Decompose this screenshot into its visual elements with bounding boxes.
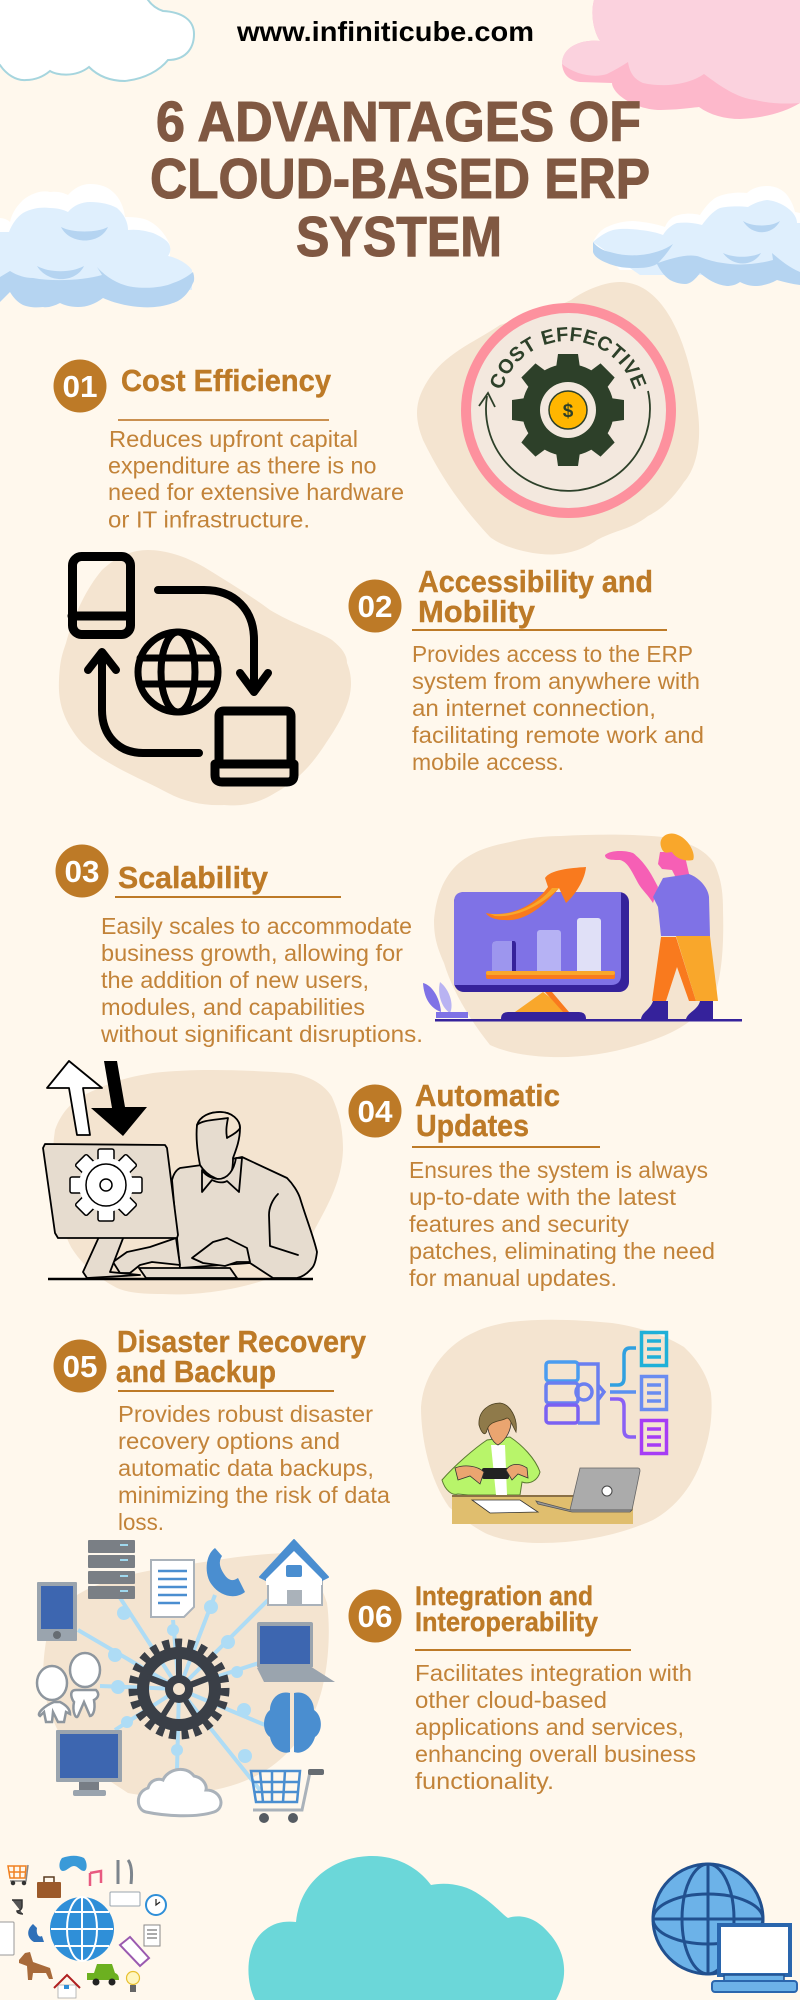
icon: handset — [28, 1924, 44, 1942]
body 01: expenditure as there is no — [108, 452, 376, 478]
cloud: pink top right — [562, 0, 800, 119]
icon: monitor — [56, 1730, 122, 1796]
body 01: need for extensive hardware — [108, 479, 404, 505]
badge number 06: 06 — [358, 1599, 392, 1634]
curved label: COST EFFECTIVE — [490, 327, 646, 390]
icon: laptop — [215, 711, 294, 782]
heading 02: Accessibility and — [418, 564, 653, 599]
heading 04: Automatic — [415, 1078, 560, 1113]
icon: dog — [19, 1952, 53, 1980]
icon: globe — [138, 632, 218, 712]
icon: cart — [8, 1865, 28, 1884]
badge number 02 — [348, 580, 402, 632]
icon: brain — [264, 1692, 321, 1753]
body 02 — [412, 641, 704, 775]
title — [150, 90, 650, 269]
icon: cloud — [138, 1769, 221, 1816]
body 05: recovery options and — [118, 1428, 340, 1454]
body 04: up-to-date with the latest — [409, 1184, 676, 1210]
body 04 — [409, 1157, 715, 1291]
heading 02 — [418, 564, 653, 629]
body 02: Provides access to the ERP — [412, 641, 693, 667]
person — [442, 1403, 540, 1495]
arrow: growth — [486, 867, 586, 920]
icon: plug — [12, 1900, 23, 1914]
arrow: bottom left — [88, 652, 199, 753]
body 01: or IT infrastructure. — [108, 506, 310, 532]
icon: iot globe — [50, 1897, 114, 1961]
icon: suitcase — [37, 1877, 61, 1898]
badge number 05 — [54, 1340, 106, 1392]
body 01 — [108, 426, 404, 532]
illustration 04: man at computer — [43, 1061, 343, 1294]
heading 03: Scalability — [118, 860, 269, 895]
arrow: down black — [91, 1061, 147, 1136]
icon: music note — [90, 1871, 101, 1886]
body 05: loss. — [118, 1509, 164, 1535]
icon: telephone — [207, 1548, 245, 1596]
panel 04: automatic updates text — [348, 1078, 715, 1291]
icon: document — [151, 1560, 194, 1617]
body 03: the addition of new users, — [101, 967, 369, 993]
title: CLOUD-BASED ERP — [150, 147, 650, 211]
heading 04 — [415, 1078, 560, 1143]
body 02: facilitating remote work and — [412, 722, 704, 748]
body 05: Provides robust disaster — [118, 1401, 373, 1427]
body 05 — [118, 1401, 391, 1535]
icon: clock — [146, 1895, 166, 1915]
body 06: functionality. — [415, 1768, 554, 1794]
icon: plant — [423, 982, 468, 1018]
connector spokes — [78, 1590, 268, 1790]
icon: monitor chart — [454, 892, 629, 1019]
badge number 04 — [348, 1084, 402, 1138]
icon: phone — [72, 556, 130, 634]
illustration 06: integration hub — [37, 1540, 335, 1823]
icon: gear with dollar — [512, 354, 624, 466]
body 03: without significant disruptions. — [100, 1021, 423, 1047]
panel 06: integration text — [348, 1581, 696, 1794]
website url: www.infiniticube.com — [236, 16, 534, 47]
icon: server network — [546, 1332, 666, 1454]
illustration 05: person with laptop and servers — [421, 1320, 712, 1543]
body 04: patches, eliminating the need — [409, 1238, 715, 1264]
cloud: blue left — [0, 184, 194, 307]
title: 6 ADVANTAGES OF — [156, 90, 641, 154]
person — [605, 833, 718, 1019]
icon: house — [54, 1975, 80, 1998]
body 02: mobile access. — [412, 749, 564, 775]
icon: server rack — [88, 1540, 135, 1599]
body 05: minimizing the risk of data — [118, 1482, 391, 1508]
icon: document — [144, 1925, 160, 1946]
body 06: enhancing overall business — [415, 1741, 696, 1767]
icon: shopping cart — [251, 1769, 324, 1823]
icon: bulb — [126, 1972, 140, 1992]
arrow: top right — [158, 590, 268, 692]
body 03: modules, and capabilities — [101, 994, 365, 1020]
icon: white gear — [70, 1149, 142, 1221]
icon: air conditioner — [110, 1892, 140, 1906]
body 06: other cloud-based — [415, 1687, 607, 1713]
badge number 06 — [348, 1590, 402, 1642]
icon: fork and knife — [118, 1860, 132, 1884]
cloud: blue right — [593, 186, 800, 286]
icon: laptop — [536, 1468, 640, 1512]
icon: piano — [120, 1937, 149, 1966]
badge number 02: 02 — [358, 589, 392, 624]
cloud: teal bottom — [248, 1856, 564, 2000]
body 02: system from anywhere with — [412, 668, 700, 694]
heading 05 — [116, 1324, 367, 1389]
icon: gamepad — [59, 1856, 87, 1871]
badge number 03 — [56, 844, 108, 898]
badge number 01: 01 — [62, 369, 98, 404]
icon: people — [37, 1653, 100, 1722]
icon: hub gear — [133, 1643, 225, 1735]
panel 02: accessibility text — [348, 564, 704, 775]
icon: car — [87, 1964, 119, 1986]
cloud: white top left — [0, 0, 194, 81]
badge number 03: 03 — [64, 854, 100, 889]
icon: circular arrow — [479, 391, 650, 491]
heading 06 — [415, 1581, 598, 1637]
body 04: features and security — [409, 1211, 629, 1237]
badge number 04: 04 — [358, 1094, 393, 1129]
man — [113, 1112, 317, 1278]
heading 06: Integration and — [415, 1581, 593, 1611]
icon: tablet — [37, 1582, 77, 1641]
heading 05: Disaster Recovery — [117, 1324, 367, 1359]
body 06 — [415, 1660, 696, 1794]
illustration 01: cost effective badge — [417, 282, 699, 554]
body 03: business growth, allowing for — [101, 940, 403, 966]
badge number 01 — [54, 360, 106, 412]
panel 03: scalability text — [56, 844, 423, 1047]
heading 05: and Backup — [116, 1354, 276, 1389]
body 02: an internet connection, — [412, 695, 656, 721]
body 01: Reduces upfront capital — [109, 426, 358, 452]
illustration: internet of things cluster — [0, 1856, 166, 1998]
body 06: applications and services, — [415, 1714, 684, 1740]
computer — [43, 1144, 313, 1279]
body 04: Ensures the system is always — [409, 1157, 708, 1183]
icon: house — [260, 1540, 328, 1606]
illustration 02: devices and globe — [59, 550, 351, 805]
body 06: Facilitates integration with — [415, 1660, 692, 1686]
heading 01: Cost Efficiency — [121, 363, 332, 398]
icon: gear with dollar: $ — [563, 401, 574, 422]
badge number 05: 05 — [62, 1349, 98, 1384]
body 03 — [100, 913, 423, 1047]
title: SYSTEM — [296, 205, 502, 269]
heading 06: Interoperability — [415, 1607, 598, 1637]
panel 05: disaster recovery text — [54, 1324, 391, 1535]
illustration 03: growth chart and person — [423, 833, 742, 1057]
body 03: Easily scales to accommodate — [101, 913, 412, 939]
icon: fridge — [0, 1922, 14, 1955]
body 04: for manual updates. — [409, 1265, 617, 1291]
heading 02: Mobility — [418, 594, 536, 629]
desk — [452, 1495, 633, 1524]
arrow: up white — [47, 1061, 102, 1135]
heading 04: Updates — [416, 1108, 529, 1143]
icon: laptop — [257, 1622, 335, 1682]
body 05: automatic data backups, — [118, 1455, 374, 1481]
icon: globe with laptop — [653, 1864, 797, 1992]
panel 01: cost efficiency text — [54, 360, 404, 532]
